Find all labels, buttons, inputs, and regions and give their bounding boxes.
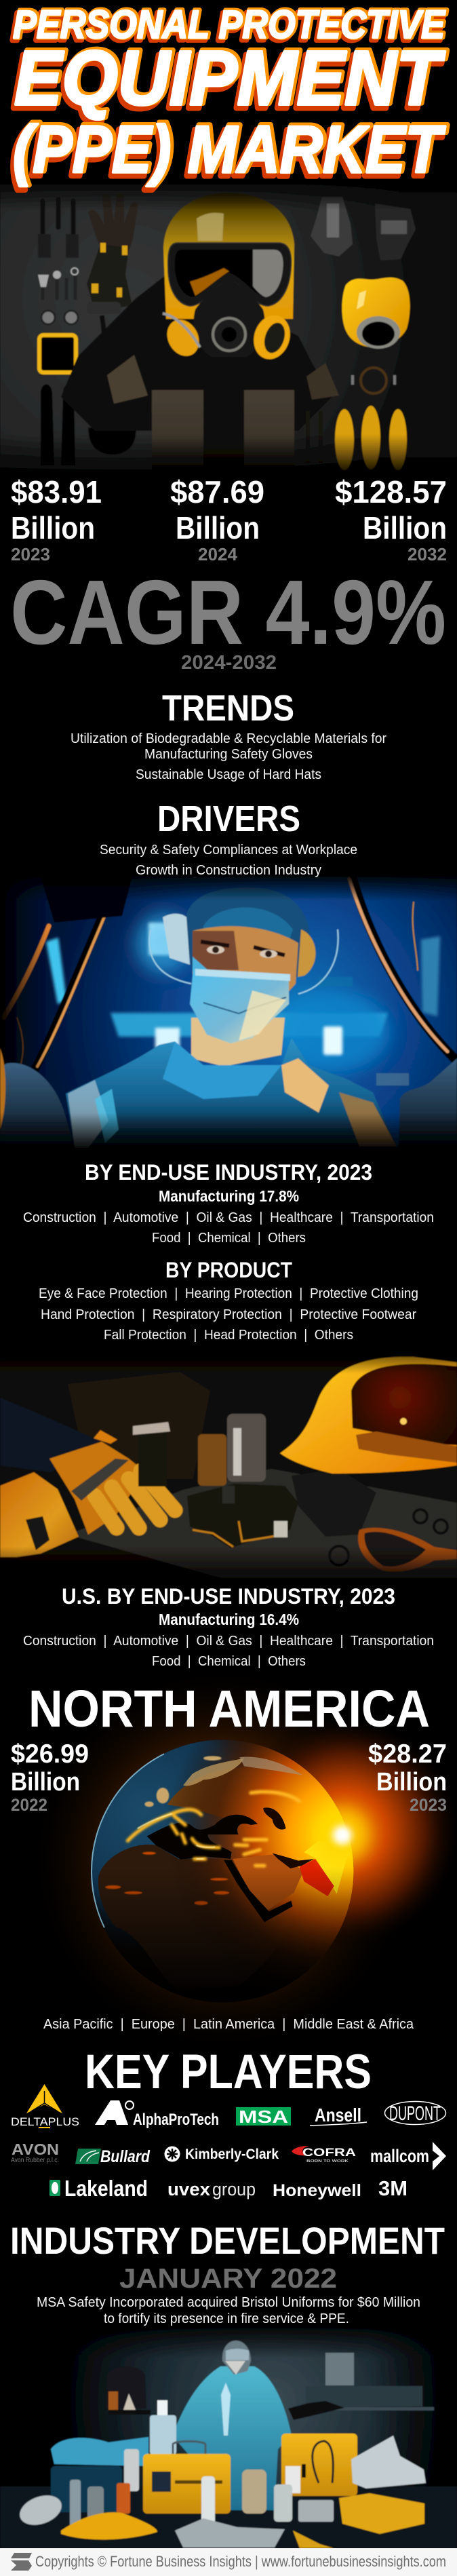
- surgeon: gown: [66, 1038, 397, 1148]
- globe: city lights: [127, 1792, 300, 1866]
- stat 2023: Billion: [376, 1768, 447, 1796]
- trend 1: Utilization of Biodegradable & Recyclable Materials for: [71, 731, 386, 746]
- gear: background sacks: [68, 1372, 210, 1479]
- panel: industry development: [10, 2219, 445, 2326]
- gear: black gloves: [292, 1469, 376, 1537]
- globe: city light cores: [138, 1813, 215, 1859]
- logo: Bullard: [75, 2147, 151, 2166]
- kit: yellow cloth: [61, 2512, 157, 2539]
- hero: yellow insoles: [335, 406, 407, 470]
- kit: worker: [172, 2341, 344, 2510]
- logos: [11, 2084, 446, 2201]
- product list: [39, 1286, 418, 1343]
- kit: white supplies: [175, 2518, 285, 2548]
- hero: top right canisters: [311, 197, 416, 261]
- surgeon: tubes: [3, 879, 454, 1085]
- kit: yellow towel: [293, 2531, 334, 2548]
- description: to fortify its presence in fire service & PPE.: [104, 2311, 349, 2326]
- surgeon: background light panels: [46, 913, 440, 1085]
- kit: yellow box: [339, 2493, 424, 2534]
- title: [11, 2, 448, 190]
- stat 2032: Billion: [363, 510, 447, 545]
- hero: ring clamp: [353, 368, 395, 393]
- logo: Mallcom: [370, 2142, 446, 2170]
- logo: uvex group: [167, 2179, 256, 2199]
- title line 2: EQUIPMENT: [14, 35, 445, 121]
- hero: yellow half mask: [342, 277, 410, 349]
- logo: Ansell: Ansell: [315, 2104, 361, 2126]
- heading: BY PRODUCT: [165, 1258, 292, 1282]
- gear: table top: [68, 1469, 457, 1581]
- surgeon: neck: [191, 1018, 285, 1066]
- globe: small lights: [105, 1852, 229, 1905]
- kit: side table lamp: [106, 2366, 151, 2415]
- gear: glove back: [0, 1472, 79, 1557]
- drivers heading: DRIVERS: [157, 799, 300, 839]
- logo: Avon: Avon Rubber p.l.c.: [11, 2157, 59, 2164]
- logo: Avon: [11, 2140, 59, 2164]
- hero: right cartridge: [248, 311, 296, 364]
- stat 2024: Billion: [176, 510, 260, 545]
- panel: by product: [39, 1258, 418, 1343]
- stat 2023: 2023: [11, 544, 50, 564]
- image: globe: [61, 1665, 450, 2022]
- product list: Hand Protection | Respiratory Protection | Protective Footwear: [41, 1307, 416, 1322]
- image: surgeon in mask: [0, 874, 457, 1151]
- stat 2023: $83.91: [11, 474, 102, 510]
- logo: uvex group: uvex: [167, 2179, 210, 2199]
- description: [37, 2294, 420, 2326]
- globe: mediterranean: [147, 1815, 258, 1860]
- hero: black bowl: [88, 427, 136, 455]
- trend 1: [71, 731, 386, 762]
- stat 2032: $128.57: [335, 474, 447, 510]
- globe: india: [304, 1841, 354, 1894]
- panel: market size stats: [11, 474, 447, 564]
- CAGR period: 2024-2032: [181, 652, 277, 674]
- logo: AlphaProTech: AlphaProTech: [133, 2111, 219, 2129]
- segment list: Food | Chemical | Others: [152, 1230, 306, 1246]
- segment list: Construction | Automotive | Oil & Gas | Healthcare | Transportation: [23, 1633, 434, 1649]
- driver 1: Security & Safety Compliances at Workplace: [100, 842, 357, 858]
- globe: red sea: [224, 1860, 293, 1922]
- logo: Cofra: BORN TO WORK: [306, 2159, 349, 2164]
- panel: drivers: [100, 799, 357, 878]
- gear: dark parts: [330, 1510, 448, 1565]
- stat 2023: 2023: [410, 1796, 447, 1815]
- gear: amber jar: [198, 1434, 226, 1486]
- title line 2: EQUIPMENT: [12, 39, 443, 124]
- stat 2022: $26.99: [11, 1739, 89, 1769]
- segment list: Construction | Automotive | Oil & Gas | Healthcare | Transportation: [23, 1210, 434, 1225]
- manufacturing share: Manufacturing 16.4%: [159, 1611, 299, 1628]
- logo: uvex group: group: [212, 2179, 256, 2199]
- surgeon: face mask: [190, 969, 290, 1043]
- gear: clear jar: [227, 1414, 266, 1482]
- hero: centre filter: [213, 318, 245, 351]
- heading: BY END-USE INDUSTRY, 2023: [85, 1160, 372, 1185]
- gear: black goggles: [187, 1484, 298, 1548]
- logo: Avon: AVON: [12, 2140, 59, 2158]
- kit: navy case: [51, 2466, 122, 2512]
- hero: body suit: [61, 275, 339, 472]
- kit: table: [0, 2486, 457, 2548]
- stat 2023: [368, 1739, 447, 1815]
- footer: logo: [11, 2553, 32, 2571]
- stat 2023: $28.27: [368, 1739, 447, 1769]
- panel: by end-use industry: [23, 1160, 434, 1246]
- segment list: Food | Chemical | Others: [152, 1653, 306, 1669]
- hero: pliers: [308, 411, 321, 463]
- globe: rim: [92, 1740, 353, 2002]
- stat 2022: 2022: [11, 1796, 47, 1815]
- surgeon: head and cap: [149, 887, 338, 1011]
- product list: Eye & Face Protection | Hearing Protection | Protective Clothing: [39, 1286, 418, 1301]
- kit: bottles: [70, 2449, 292, 2531]
- stat 2032: [335, 474, 447, 564]
- segment list: [23, 1210, 434, 1246]
- product list: Fall Protection | Head Protection | Others: [104, 1327, 353, 1343]
- kit: shelf right: [305, 2353, 434, 2410]
- logo: 3M: 3M: [378, 2176, 408, 2200]
- date: JANUARY 2022: [119, 2263, 337, 2294]
- hero: yellow square frame: [39, 335, 76, 372]
- image: safety gear on workbench: [0, 1340, 457, 1583]
- logo: Delta Plus: [11, 2084, 79, 2128]
- other regions: Asia Pacific | Europe | Latin America | Middle East & Africa: [43, 2016, 414, 2032]
- kit: monitor device: [298, 2500, 334, 2522]
- logo: Cofra: COFRA: [302, 2146, 356, 2159]
- driver 2: Growth in Construction Industry: [136, 862, 322, 878]
- kit: white roll: [16, 2490, 66, 2531]
- stat 2024: [170, 474, 264, 564]
- kit: yellow case centre: [143, 2441, 231, 2514]
- logo: Mallcom: mallcom: [370, 2146, 429, 2166]
- logo: Cofra: [292, 2146, 356, 2164]
- trend 2: Sustainable Usage of Hard Hats: [136, 767, 321, 782]
- kit: yellow case right: [281, 2434, 357, 2496]
- globe: arabia: [233, 1854, 304, 1911]
- globe: sun flare: [315, 1808, 370, 1862]
- globe: eurasia land: [167, 1767, 260, 1818]
- logo: Honeywell: Honeywell: [273, 2181, 361, 2200]
- gear: sleeve: [0, 1398, 102, 1472]
- trends heading: TRENDS: [162, 688, 294, 729]
- logo: Delta Plus: DELTAPLUS: [11, 2116, 79, 2128]
- manufacturing share: Manufacturing 17.8%: [159, 1187, 299, 1205]
- trend 1: Manufacturing Safety Gloves: [144, 746, 313, 762]
- logo: Kimberly-Clark: Kimberly-Clark: [185, 2147, 279, 2162]
- stat 2022: Billion: [11, 1768, 80, 1796]
- hero: respirator: [161, 278, 296, 364]
- globe: persian gulf: [273, 1853, 314, 1868]
- footer bar: [0, 2548, 457, 2576]
- globe: red coast: [300, 1859, 334, 1896]
- hero: black boots: [41, 384, 75, 465]
- logo: MSA: MSA: [239, 2107, 288, 2127]
- hero: glove: [84, 193, 138, 397]
- segment list: [23, 1633, 434, 1669]
- kit: white cloth: [351, 2436, 426, 2488]
- kit: blue bag: [51, 2437, 148, 2466]
- stat 2023: Billion: [11, 510, 95, 545]
- logo: AlphaProTech: [95, 2100, 219, 2129]
- image: PPE worker with kits: [0, 2324, 457, 2548]
- stat 2024: $87.69: [170, 474, 264, 510]
- globe: northern lights: [144, 1756, 222, 1807]
- gear: orange goggles: [358, 1528, 457, 1572]
- heading: key players: KEY PLAYERS: [85, 2045, 372, 2099]
- stat 2022: [11, 1739, 89, 1815]
- hero image: PPE flat lay: [0, 178, 457, 476]
- hero: helmet: [163, 193, 294, 319]
- stat 2023: [11, 474, 102, 564]
- heading: U.S. BY END-USE INDUSTRY, 2023: [62, 1584, 395, 1609]
- logo: Bullard: Bullard: [100, 2147, 151, 2166]
- gear: metal cup: [133, 1422, 170, 1486]
- surgeon: shoulders: [0, 1058, 457, 1148]
- globe: caspian: [263, 1807, 286, 1830]
- globe: clouds north: [183, 1758, 244, 1786]
- panel: U.S. by end-use industry: [23, 1584, 434, 1669]
- globe: africa: [98, 1844, 245, 1969]
- kit: tall bottle: [150, 2400, 176, 2455]
- gear: glove front: [49, 1430, 175, 1535]
- stat 2032: 2032: [408, 544, 447, 564]
- hero: left small tools: [38, 199, 79, 324]
- logo: Lakeland: Lakeland: [64, 2176, 148, 2201]
- hero: helmet highlight: [197, 213, 224, 241]
- panel: trends: [71, 688, 386, 782]
- hero: left cartridge: [161, 313, 205, 362]
- gear: hard hat: [280, 1357, 457, 1474]
- stat 2024: 2024: [198, 544, 238, 564]
- hero: goggles: [168, 243, 291, 306]
- description: MSA Safety Incorporated acquired Bristol Uniforms for $60 Million: [37, 2294, 420, 2310]
